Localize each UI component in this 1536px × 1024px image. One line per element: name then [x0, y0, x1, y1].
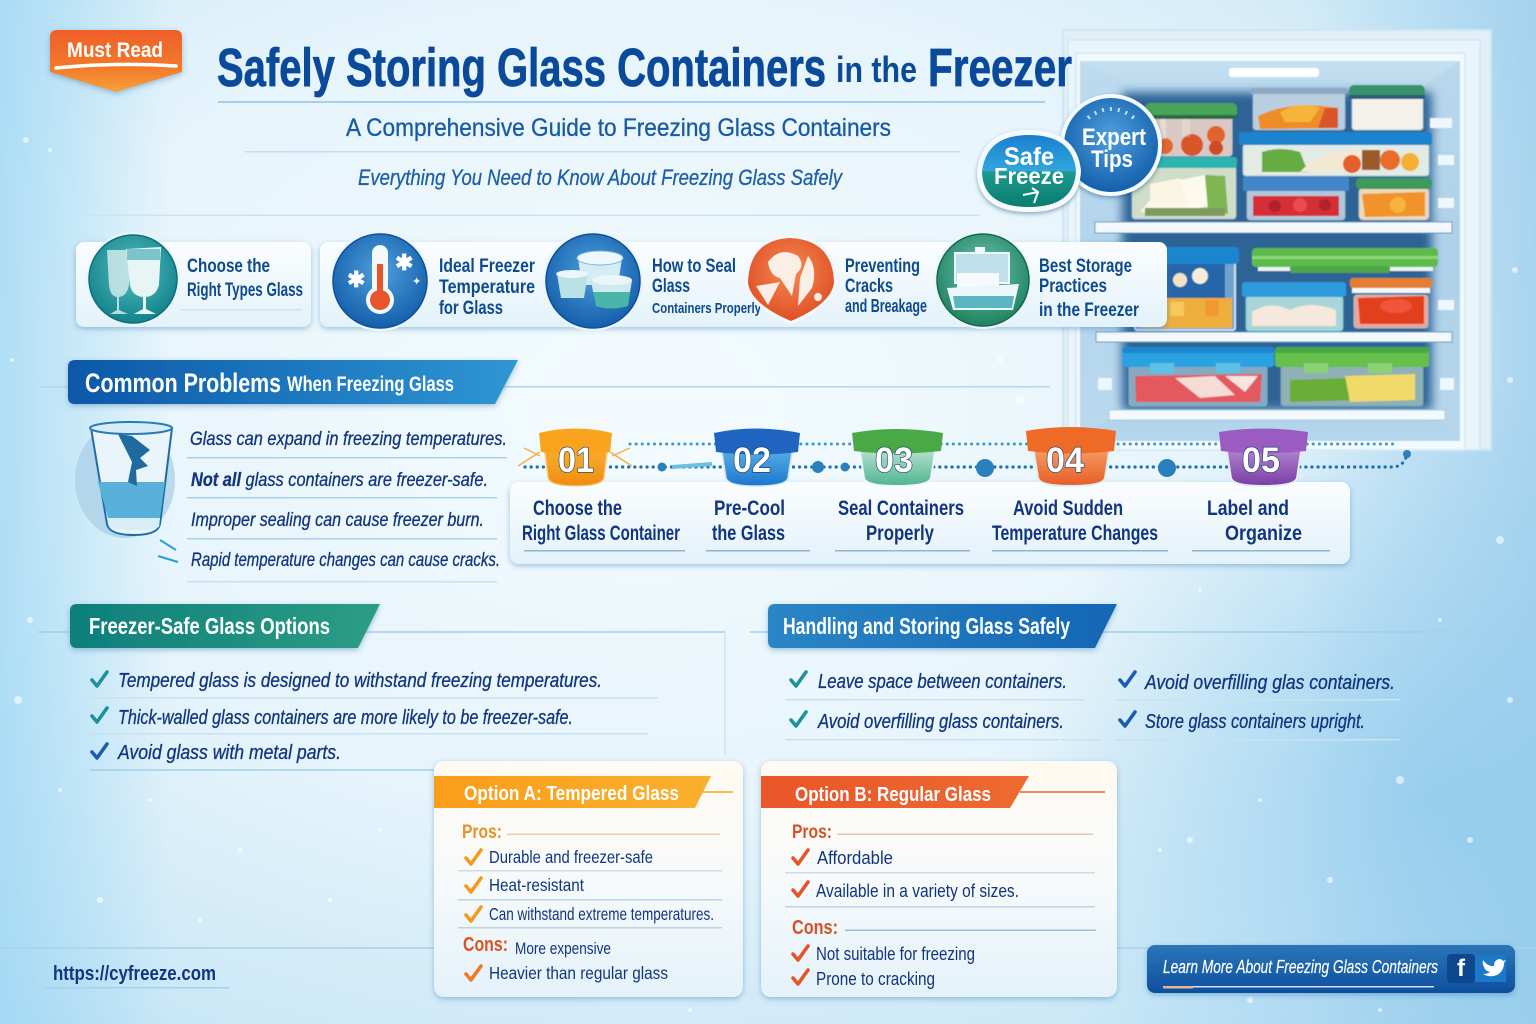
- container: vegetables: [1275, 347, 1429, 406]
- dotted path: [518, 444, 1411, 477]
- card: choose glass: [76, 232, 311, 327]
- container: white food: [1349, 85, 1425, 130]
- badge: expert tips: Expert: [1082, 124, 1146, 151]
- website link: https://cyfreeze.com: [53, 963, 216, 985]
- heading: Handling and Storing Glass Safely: [783, 613, 1070, 639]
- header: [434, 776, 733, 808]
- card text: How to Seal: [652, 256, 736, 277]
- tagline: Everything You Need to Know About Freezing Glass Safely: [358, 165, 844, 190]
- container: green lid tomatoes: [1145, 103, 1237, 156]
- badge: expert tips: Tips: [1091, 146, 1133, 173]
- horizontal footer rules: [0, 947, 1536, 949]
- icon: thermometer: ✦: [412, 276, 421, 288]
- jar 01: [539, 428, 612, 486]
- panel: option A: [434, 761, 743, 997]
- pros: [785, 822, 1095, 908]
- card text: and Breakage: [845, 296, 927, 316]
- card text: Glass: [652, 276, 690, 297]
- step 04: [992, 427, 1168, 552]
- icon: storage boxes: [934, 231, 1032, 329]
- step 04: Avoid Sudden: [1013, 497, 1123, 520]
- icon: twitter: [1475, 955, 1506, 982]
- subtitle: A Comprehensive Guide to Freezing Glass Containers: [346, 114, 891, 142]
- pros: Can withstand extreme temperatures.: [489, 904, 714, 924]
- cons: Heavier than regular glass: [489, 963, 668, 983]
- heading: Freezer-Safe Glass Options: [89, 613, 330, 639]
- card text: Containers Properly: [652, 300, 761, 317]
- item: Avoid overfilling glass containers.: [817, 711, 1064, 733]
- card text: in the Freezer: [1039, 300, 1139, 321]
- pros: Pros:: [462, 822, 502, 843]
- badge: safe freeze: Safe: [1004, 143, 1054, 171]
- pros: [458, 822, 722, 928]
- container: red berries: [1243, 177, 1349, 220]
- item: Avoid overfilling glas containers.: [1144, 672, 1395, 694]
- step 03: Seal Containers: [838, 497, 964, 520]
- panel: five steps: [510, 427, 1411, 564]
- heading: common problems: When Freezing Glass: [287, 373, 454, 396]
- icon: thermometer: ✱: [347, 267, 365, 292]
- title: Safely Storing Glass Containers: [217, 38, 826, 98]
- badge: must read: [50, 30, 182, 92]
- item: [1115, 672, 1400, 700]
- jar 02: 02: [733, 441, 771, 480]
- card text: Right Types Glass: [187, 280, 303, 301]
- card text: Preventing: [845, 256, 920, 277]
- badge: safe freeze: [977, 130, 1081, 212]
- step 05: Label and: [1207, 497, 1289, 520]
- title: in the: [836, 49, 917, 90]
- icon: thermometer: ✱: [395, 250, 413, 275]
- jar 04: [1026, 427, 1116, 486]
- item: Store glass containers upright.: [1145, 711, 1365, 733]
- cons: Cons:: [463, 934, 508, 956]
- step 02: Pre-Cool: [714, 497, 785, 520]
- pros: Affordable: [817, 848, 893, 868]
- card text: [845, 256, 927, 316]
- step 02: the Glass: [712, 522, 785, 545]
- step 01: Right Glass Container: [522, 522, 680, 545]
- cons: [463, 934, 668, 983]
- container: teal lid white food: [1132, 157, 1237, 219]
- item: Tempered glass is designed to withstand freezing temperatures.: [118, 670, 602, 692]
- item: Thick-walled glass containers are more likely to be freezer-safe.: [118, 707, 573, 729]
- step 04: Temperature Changes: [992, 522, 1158, 545]
- panel: handling and storing: [750, 604, 1536, 740]
- card text: [1039, 256, 1139, 321]
- container: orange cubes: [1356, 178, 1432, 220]
- pros: Pros:: [792, 822, 832, 843]
- list: common problems: Rapid temperature changes can cause cracks.: [191, 550, 500, 571]
- header: Option B: Regular Glass: [795, 784, 991, 806]
- panel: freezer-safe options: [38, 604, 725, 770]
- header: [761, 776, 1105, 808]
- badge: expert tips: [1060, 94, 1162, 196]
- card text: for Glass: [439, 298, 503, 319]
- card text: [187, 256, 303, 301]
- card text: [439, 256, 535, 319]
- badge: safe freeze: Freeze: [994, 163, 1064, 189]
- icon: glasses: [86, 232, 180, 326]
- list: common problems: [187, 429, 507, 582]
- heading: [768, 604, 1117, 648]
- jar 04: 04: [1046, 441, 1085, 480]
- icon: cracked drinking glass: [75, 422, 178, 562]
- freezer frame: [1063, 30, 1491, 450]
- container: orange food: [1250, 88, 1347, 130]
- container: long blue lid mixed food: [1239, 132, 1432, 176]
- heading: [70, 604, 380, 648]
- container: long green lid: [1252, 248, 1438, 273]
- card group: four topics: [320, 231, 1167, 331]
- list: common problems: Glass can expand in freezing temperatures.: [190, 429, 507, 450]
- call to action button: Learn More About Freezing Glass Containers: [1163, 957, 1438, 977]
- item: [1115, 711, 1400, 740]
- cons: Cons:: [792, 917, 838, 939]
- step 01: Choose the: [533, 497, 622, 520]
- header: Option A: Tempered Glass: [464, 783, 679, 805]
- jar 01: 01: [558, 441, 594, 480]
- step 03: [835, 429, 970, 552]
- shelves: [1095, 222, 1452, 420]
- pros: Available in a variety of sizes.: [816, 881, 1019, 901]
- icon: facebook: f: [1457, 955, 1466, 982]
- jar 05: 05: [1242, 441, 1280, 480]
- step 01: [522, 428, 685, 552]
- item: Leave space between containers.: [818, 671, 1067, 693]
- step 03: Properly: [866, 522, 934, 545]
- item: Avoid glass with metal parts.: [117, 742, 341, 764]
- card text: Best Storage: [1039, 256, 1132, 277]
- pros: Durable and freezer-safe: [489, 847, 653, 867]
- cons: Prone to cracking: [816, 969, 935, 989]
- jar 03: 03: [875, 441, 913, 480]
- call to action button: [1147, 945, 1515, 993]
- icon: thermometer: [330, 231, 430, 331]
- container: orange lid red food: [1350, 278, 1432, 328]
- pros: Heat-resistant: [489, 875, 584, 895]
- heading: common problems: [40, 360, 1050, 404]
- step 02: [706, 428, 810, 552]
- cons: More expensive: [515, 940, 611, 958]
- list: common problems: Not all glass containers are freezer-safe.: [191, 470, 488, 491]
- list: common problems: Improper sealing can cause freezer burn.: [191, 510, 484, 531]
- container: blue lid white food: [1242, 282, 1346, 331]
- card text: Ideal Freezer: [439, 256, 535, 277]
- card text: [652, 256, 761, 317]
- title: Freezer: [928, 38, 1072, 98]
- heading: common problems: Common Problems: [85, 368, 281, 398]
- panel: topic cards: [76, 231, 1167, 331]
- icon: sealed containers: [543, 231, 643, 331]
- badge: must read: Must Read: [67, 39, 163, 62]
- item: [785, 671, 1085, 700]
- step 05: [1192, 428, 1330, 552]
- container: meat: [1122, 347, 1274, 406]
- container: tall blue lid yellow food: [1130, 247, 1239, 330]
- card text: Cracks: [845, 276, 893, 297]
- freezer illustration: [1063, 30, 1491, 450]
- card text: Choose the: [187, 256, 270, 277]
- cons: Not suitable for freezing: [816, 944, 975, 964]
- icon: cracked glass: [745, 235, 837, 325]
- card text: Practices: [1039, 276, 1107, 297]
- icon: facebook: [1447, 954, 1475, 983]
- card text: Temperature: [439, 277, 535, 298]
- panel: option B: [761, 761, 1117, 997]
- cons: [792, 917, 1096, 989]
- step 05: Organize: [1225, 522, 1302, 545]
- item: [785, 711, 1100, 740]
